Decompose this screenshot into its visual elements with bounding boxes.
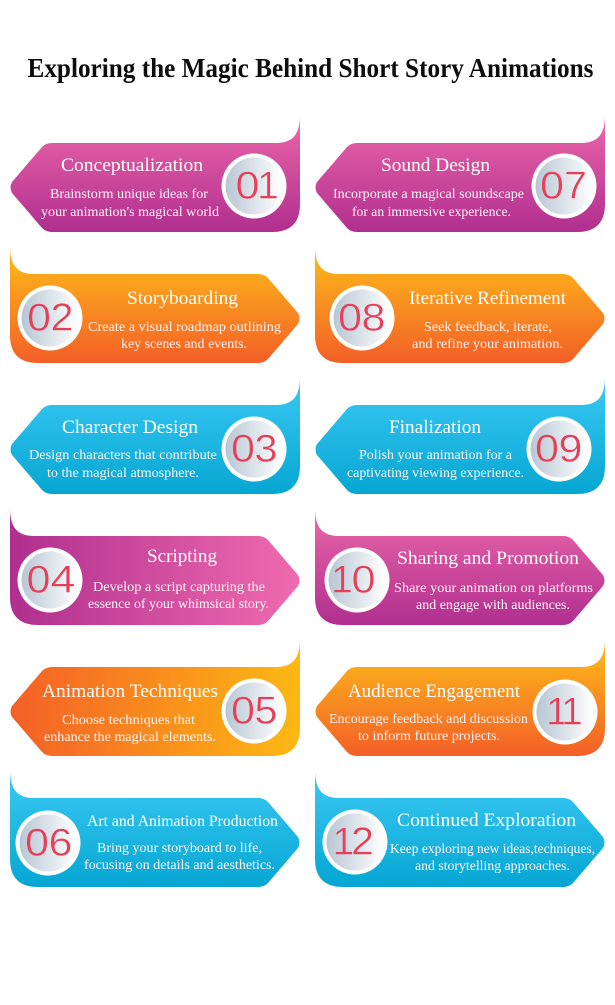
heading: Audience Engagement: Audience Engagement (348, 681, 521, 702)
panel: 04 Scripting (10, 508, 300, 625)
panel: 09 Finalization (316, 377, 605, 494)
number badge: 10: 1 (331, 558, 353, 602)
description: step 07 (333, 186, 524, 219)
description: step 04 (88, 579, 269, 611)
number badge: 08: 0 (338, 296, 362, 340)
description: step 11 (329, 711, 528, 743)
number badge: 02: 2 (50, 296, 74, 340)
panel: 10 Sharing and Promotion (315, 508, 604, 625)
description: step 07: Incorporate a magical soundscape (333, 186, 524, 201)
number badge: 09: 0 (535, 428, 559, 470)
heading: Iterative Refinement: Iterative Refinement (409, 288, 567, 309)
panel: 12 Continued Exploration (315, 770, 604, 887)
number badge: 05: 0 (231, 690, 255, 732)
heading: Finalization: Finalization (389, 417, 482, 438)
number badge: 03: 3 (254, 428, 278, 470)
number badge: 11 (532, 680, 598, 744)
description: step 10: and engage with audiences. (416, 597, 570, 612)
number badge: 11: 1 (546, 690, 568, 734)
panel: 01 Conceptualization (10, 115, 300, 232)
number badge: 07: 0 (540, 164, 564, 208)
description: step 12: and storytelling approaches. (415, 858, 570, 873)
number badge: 12: 1 (333, 820, 354, 864)
number badge: 11: 1 (561, 690, 583, 734)
description: step 01: your animation's magical world (41, 204, 219, 219)
description: step 05 (44, 712, 216, 744)
description: step 04: Develop a script capturing the (93, 579, 265, 594)
description: step 12 (390, 841, 595, 873)
panel: 08 Iterative Refinement (315, 246, 604, 363)
number badge: 05 (222, 678, 286, 744)
description: step 02: Create a visual roadmap outlining (88, 319, 281, 334)
description: step 02: key scenes and events. (121, 336, 247, 351)
description: step 06: Bring your storyboard to life, (97, 840, 262, 855)
description: step 10 (394, 580, 593, 612)
number badge: 07: 7 (564, 164, 587, 208)
panel: 06 Art and Animation Production (10, 770, 300, 887)
number badge: 06: 0 (25, 822, 49, 864)
description: step 07: for an immersive experience. (352, 204, 511, 219)
description: step 09: Polish your animation for a (359, 447, 512, 462)
number badge: 06 (16, 810, 80, 876)
number badge: 12 (322, 810, 388, 874)
description: step 10: Share your animation on platforms (394, 580, 593, 595)
number badge: 08 (330, 286, 394, 350)
description: step 04: essence of your whimsical story. (88, 596, 269, 611)
description: step 09 (347, 447, 524, 480)
number badge: 10 (324, 548, 390, 612)
number badge: 03: 0 (231, 428, 255, 470)
heading: Continued Exploration: Continued Exploration (397, 810, 577, 831)
description: step 09: captivating viewing experience. (347, 465, 524, 480)
number badge: 01: 1 (257, 164, 279, 208)
description: step 01 (41, 186, 219, 219)
number badge: 02: 0 (27, 296, 51, 340)
description: step 08: and refine your animation. (412, 336, 563, 351)
description: step 03: Design characters that contribute (29, 447, 217, 462)
heading: Art and Animation Production: Art and Animation Production (87, 813, 278, 830)
description: step 08: Seek feedback, iterate, (424, 319, 552, 334)
description: step 06 (84, 840, 275, 872)
heading: Sharing and Promotion: Sharing and Promotion (397, 548, 580, 569)
number badge: 03 (222, 416, 286, 482)
description: step 11: Encourage feedback and discussion (329, 711, 528, 726)
number badge: 04: 4 (50, 558, 76, 602)
description: step 03 (29, 447, 217, 480)
number badge: 12: 2 (351, 820, 374, 864)
number badge: 07 (532, 154, 596, 218)
number badge: 02 (18, 286, 82, 350)
description: step 08 (412, 319, 563, 351)
description: step 05: enhance the magical elements. (44, 729, 216, 744)
number badge: 06: 6 (48, 822, 72, 864)
heading: Character Design: Character Design (62, 417, 199, 438)
number badge: 04 (18, 548, 82, 612)
number badge: 01: 0 (236, 164, 260, 208)
panel: 11 Audience Engagement (316, 639, 605, 756)
number badge: 09: 9 (558, 428, 582, 470)
description: step 11: to inform future projects. (358, 728, 500, 743)
description: step 01: Brainstorm unique ideas for (50, 186, 209, 201)
number badge: 08: 8 (362, 296, 386, 340)
number badge: 05: 5 (254, 690, 278, 732)
heading: Animation Techniques: Animation Techniques (42, 681, 218, 702)
description: step 06: focusing on details and aesthetics. (84, 857, 275, 872)
number badge: 09 (526, 416, 592, 482)
panel: 07 Sound Design (316, 115, 605, 232)
heading: Sound Design: Sound Design (381, 155, 490, 176)
heading: Scripting: Scripting (147, 546, 217, 567)
description: step 05: Choose techniques that (62, 712, 195, 727)
number badge: 04: 0 (26, 558, 50, 602)
description: step 02 (88, 319, 281, 351)
description: step 12: Keep exploring new ideas,techniques, (390, 841, 595, 856)
panel: 05 Animation Techniques (10, 639, 300, 756)
heading: Storyboarding: Storyboarding (127, 288, 239, 309)
panel: 02 Storyboarding (10, 246, 300, 363)
number badge: 10: 0 (352, 558, 376, 602)
number badge: 01 (222, 154, 286, 218)
description: step 03: to the magical atmosphere. (47, 465, 199, 480)
heading: Conceptualization: Conceptualization (61, 155, 204, 176)
panel: 03 Character Design (10, 377, 300, 494)
